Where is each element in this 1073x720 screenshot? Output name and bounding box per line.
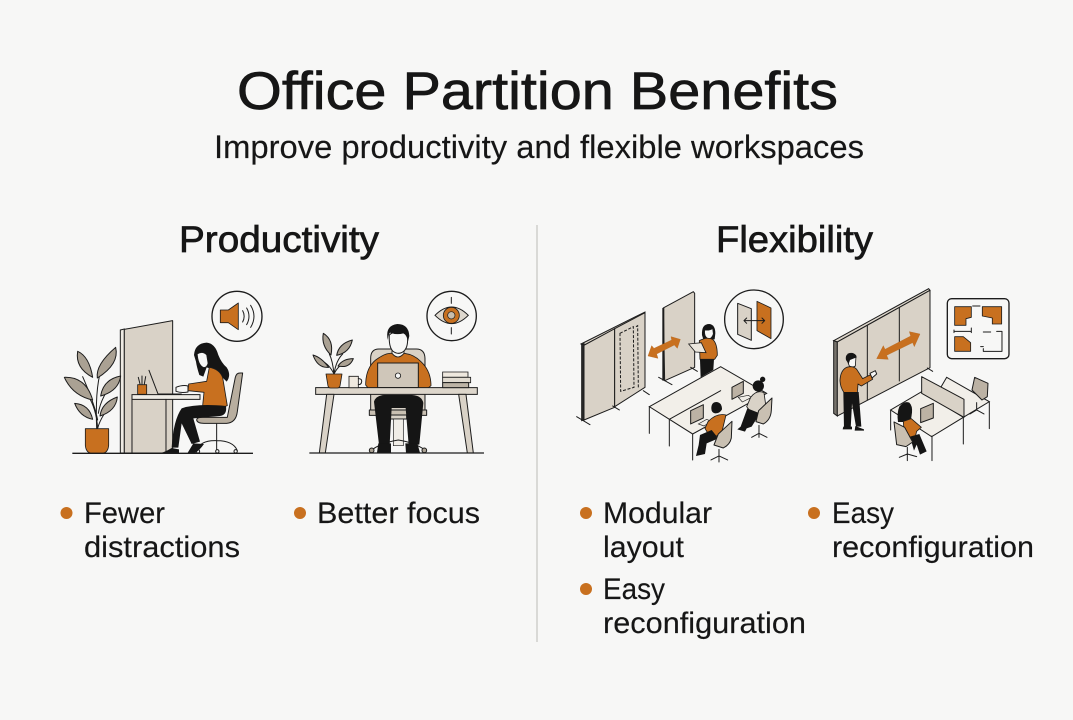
plant (64, 347, 121, 453)
pen cup (138, 385, 147, 394)
standing man (840, 353, 877, 431)
shared desk (649, 367, 767, 434)
bullet: easy reconfiguration (left) (580, 573, 806, 640)
bullet: easy reconfiguration (right): reconfiguration (832, 531, 1034, 564)
icon: eye (427, 291, 476, 341)
bullet: modular layout: Modular (603, 497, 712, 530)
ground line (309, 451, 484, 455)
bullet: fewer distractions (60, 497, 240, 564)
chair (197, 373, 243, 423)
right partition (659, 292, 697, 385)
bullet: fewer distractions: distractions (84, 531, 240, 564)
heading: flexibility: Flexibility (716, 219, 874, 260)
title: Office Partition Benefits (237, 62, 838, 121)
left partition pair (577, 312, 649, 425)
partition wall (834, 289, 933, 416)
arrow: move (648, 337, 680, 358)
seated person back right (732, 377, 772, 437)
ground line (72, 451, 253, 455)
mug (349, 376, 358, 388)
desk (316, 388, 477, 394)
icon: floor plan (947, 299, 1009, 359)
desk (132, 395, 200, 399)
bullet: modular layout: layout (603, 531, 684, 564)
plant (313, 333, 353, 388)
bullet: easy reconfiguration (right): Easy (832, 497, 894, 530)
arrow: slide (877, 332, 920, 359)
panel: flexibility (577, 219, 1034, 640)
seated woman (894, 402, 933, 461)
man (366, 324, 431, 453)
illustration: movable partitions and shared desk (577, 290, 783, 462)
laptop (378, 363, 418, 388)
bullet: fewer distractions: Fewer (84, 497, 165, 530)
bullet: easy reconfiguration (left): reconfiguration (603, 607, 806, 640)
seated person front (691, 402, 732, 462)
laptop (149, 370, 181, 394)
partition (120, 329, 124, 453)
bullet: better focus: Better focus (317, 497, 480, 530)
panel: productivity (60, 219, 484, 564)
bullet: modular layout (580, 497, 712, 564)
illustration: man at desk (309, 291, 484, 453)
illustration: woman at partitioned desk (64, 291, 262, 453)
bullet: easy reconfiguration (left): Easy (603, 573, 665, 606)
heading: productivity: Productivity (179, 219, 380, 260)
person (162, 343, 229, 453)
icon: sliding panel (725, 290, 783, 349)
books (443, 372, 468, 377)
chair (371, 349, 425, 415)
icon: speaker (212, 291, 262, 341)
illustration: reconfigurable wall and planner (834, 289, 1009, 461)
subtitle: Improve productivity and flexible workspaces (214, 129, 864, 165)
desk with screen (891, 377, 989, 461)
bullet: easy reconfiguration (right) (808, 497, 1034, 564)
standing person (689, 324, 717, 377)
